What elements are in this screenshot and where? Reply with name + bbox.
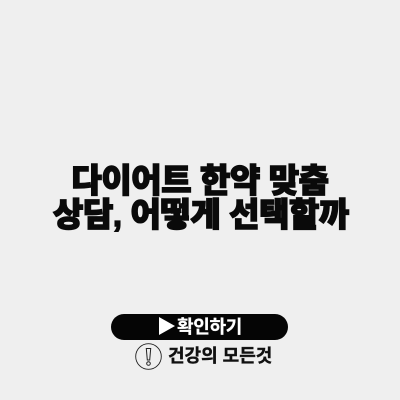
brand name: 건강의 모든것 xyxy=(168,346,272,366)
button: confirm xyxy=(111,314,288,340)
footer brand xyxy=(135,343,272,370)
button label: 확인하기 xyxy=(177,317,242,337)
icon: exclamation circle xyxy=(135,343,162,370)
title line 2: 상담, 어떻게 선택할까 xyxy=(53,196,349,233)
title line 1: 다이어트 한약 맞춤 xyxy=(71,162,329,199)
title xyxy=(52,162,350,233)
icon: play triangle xyxy=(159,317,175,335)
